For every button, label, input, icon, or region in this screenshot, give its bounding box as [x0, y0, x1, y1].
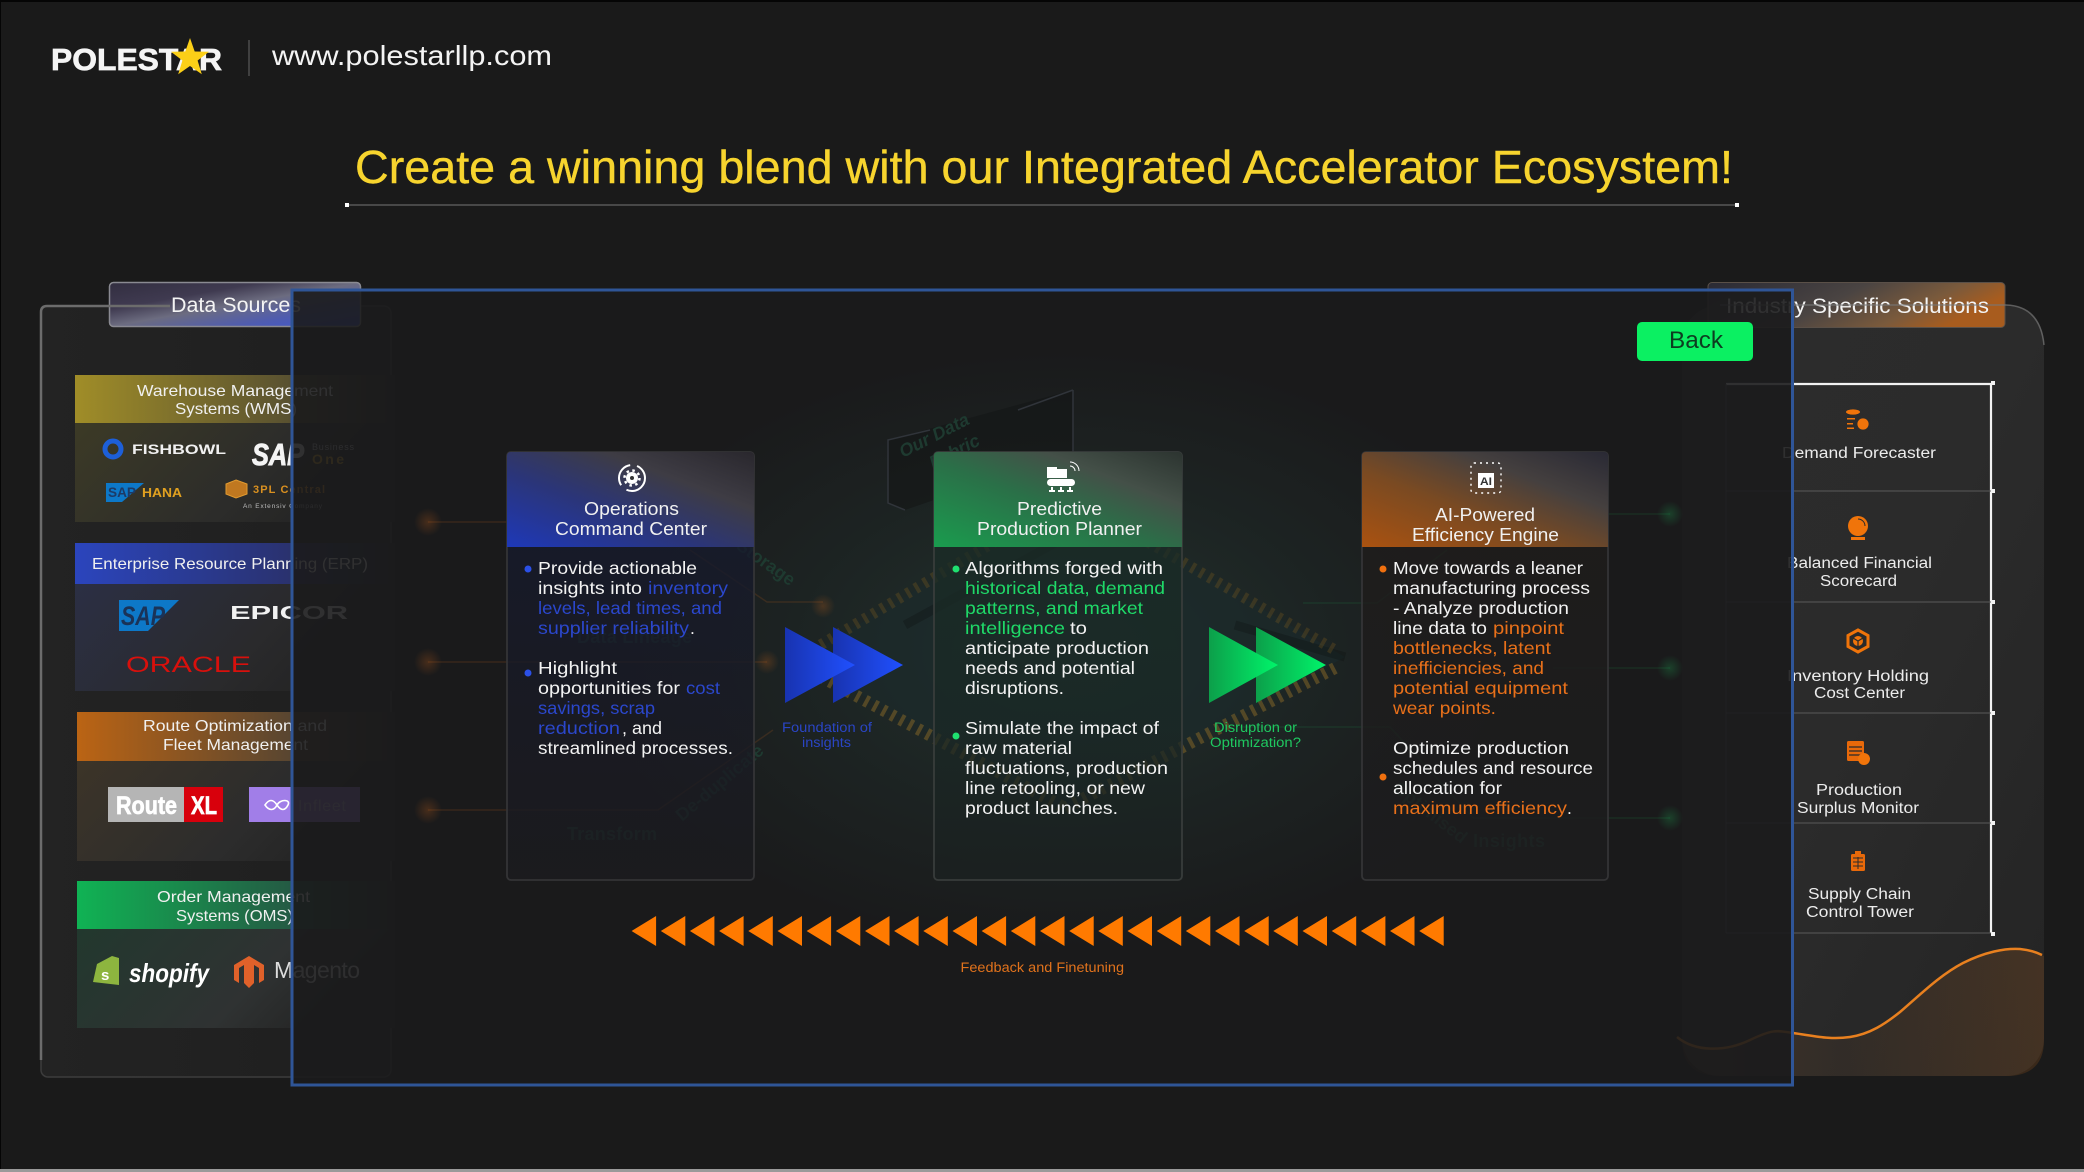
bullet text: raw material [965, 738, 1072, 758]
icon: AI chip [1471, 463, 1501, 493]
website address: www.polestarllp.com [271, 40, 552, 71]
card header [934, 452, 1182, 547]
card: warehouse management systems [75, 375, 395, 522]
card header: Predictive [1017, 499, 1102, 519]
logo: Magento [234, 956, 360, 988]
bullet text: pinpoint [1493, 618, 1564, 638]
bullet text: - Analyze production [1393, 598, 1569, 618]
arrow: foundation of insights: Foundation of [782, 720, 872, 735]
item: inventory holding cost center [1787, 630, 1929, 702]
item: balanced financial scorecard: Balanced Financial [1787, 555, 1932, 572]
logo: Shopify: shopify [129, 958, 210, 988]
logo: SAP Business One: Business [312, 442, 354, 452]
bullet text: maximum efficiency [1393, 798, 1567, 818]
icon: clipboard [1851, 851, 1865, 871]
background: faint chip and circuit traces: Data Lineage [577, 627, 692, 647]
card: order management systems [77, 881, 395, 1028]
card: warehouse management systems: Systems (WMS) [175, 401, 297, 418]
bullet text: allocation for [1393, 778, 1502, 798]
logo: 3PL Central: An Extensiv Company [243, 503, 323, 510]
card header: Operations [584, 499, 679, 519]
item: inventory holding cost center: Inventory Holding [1787, 668, 1929, 685]
item: supply chain control tower [1806, 851, 1914, 921]
logo: Route XL [108, 787, 223, 822]
bullet text: inefficiencies, and [1393, 658, 1544, 678]
card: order management systems: Systems (OMS) [176, 908, 293, 925]
logo: SAP Business One: One [312, 451, 344, 467]
item: demand forecaster [1782, 409, 1936, 462]
card: warehouse management systems: Warehouse Management [137, 383, 334, 400]
bullet text: intelligence [965, 618, 1065, 638]
bullet text: Highlight [538, 658, 617, 678]
bullet text: , and [622, 718, 662, 738]
bullet text: inventory [648, 578, 728, 598]
background: faint chip and circuit traces: Insights [1473, 831, 1545, 851]
bullet text: potential equipment [1393, 678, 1568, 698]
icon: calculator and money bag [1847, 741, 1870, 765]
logo: fleet tool [249, 787, 360, 822]
card: route optimization and fleet management: Route Optimization and [143, 718, 327, 735]
logo: Route XL: XL [191, 792, 217, 820]
card header: AI-Powered [1435, 505, 1535, 525]
card: route optimization and fleet management: Fleet Management [163, 737, 309, 754]
title: Create a winning blend with our Integrated Accelerator Ecosystem! [355, 141, 1733, 193]
background: faint chip and circuit traces: De-duplicate [672, 740, 767, 825]
logo: 3PL Central: 3PL Central [253, 484, 325, 496]
list frame [1726, 381, 1995, 936]
bullet text: Algorithms forged with [965, 558, 1163, 578]
logo: SAP: SAP [121, 601, 166, 631]
bullet text: reduction [538, 718, 620, 738]
bullet text: product launches. [965, 798, 1118, 818]
arrow: disruption or optimization: Disruption or [1214, 720, 1298, 735]
item: demand forecaster: Demand Forecaster [1782, 445, 1936, 462]
item: supply chain control tower: Supply Chain [1808, 886, 1911, 903]
item: production surplus monitor: Surplus Monitor [1797, 800, 1919, 817]
bullet text [1380, 558, 1593, 818]
bullet text: Simulate the impact of [965, 718, 1159, 738]
bullet text: opportunities for [538, 678, 680, 698]
logo: SAP HANA: HANA [142, 485, 183, 500]
logo: Polestar: POLESTAR [51, 42, 222, 77]
background: faint chip and circuit traces: Storage [733, 535, 799, 590]
bullet text: schedules and resource [1393, 758, 1593, 778]
bullet text: savings, scrap [538, 698, 655, 718]
card header: Production Planner [977, 519, 1142, 539]
bullet text: line retooling, or new [965, 778, 1145, 798]
icon: hexagon hub [1848, 630, 1868, 652]
bullet text: historical data, demand [965, 578, 1165, 598]
bullet text: . [690, 618, 695, 638]
bullet text: insights into [538, 578, 642, 598]
tab: data sources [110, 282, 360, 326]
back button [1637, 322, 1753, 361]
panel: data sources [41, 282, 395, 1077]
bullet text: cost [686, 678, 720, 698]
logo: Magento: Magento [274, 957, 360, 983]
background: faint chip and circuit traces: Fabric [926, 430, 983, 473]
icon: AI chip: AI [1480, 476, 1492, 488]
item: production surplus monitor [1797, 741, 1919, 817]
bullet text: Provide actionable [538, 558, 697, 578]
item: balanced financial scorecard [1787, 516, 1932, 590]
logo: Epicor: EPICOR [230, 603, 348, 623]
bullet text: levels, lead times, and [538, 598, 722, 618]
bullet text [952, 558, 1168, 818]
background: faint chip and circuit traces [414, 350, 1683, 950]
logo: Shopify: s [101, 967, 109, 984]
background: faint chip and circuit traces: Optimised [1390, 777, 1471, 847]
logo: Shopify [93, 956, 210, 988]
icon: rotating gear [619, 465, 645, 491]
item: production surplus monitor: Production [1816, 782, 1902, 799]
bullet text: anticipate production [965, 638, 1149, 658]
card header [507, 452, 754, 547]
logo: Route XL: Route [116, 792, 177, 820]
card header [1362, 452, 1608, 547]
bullet text: supplier reliability [538, 618, 689, 638]
arrow: disruption or optimization: Optimization? [1210, 735, 1301, 750]
tab: industry specific solutions: Industry Specific Solutions [1726, 295, 1989, 318]
bullet text: streamlined processes. [538, 738, 733, 758]
bullet text: . [1567, 798, 1572, 818]
bullet text: bottlenecks, latent [1393, 638, 1551, 658]
logo: SAP Business One [252, 437, 354, 472]
bullet text: manufacturing process [1393, 578, 1590, 598]
bullet text: wear points. [1392, 698, 1496, 718]
feedback label: Feedback and Finetuning [960, 960, 1124, 975]
card header: Command Center [555, 519, 707, 539]
bullet text: Optimize production [1393, 738, 1569, 758]
icon: crystal ball [1848, 516, 1868, 540]
panel: industry specific solutions [1677, 282, 2044, 1076]
arrow: disruption or optimization [1209, 627, 1326, 750]
card: enterprise resource planning [75, 543, 395, 691]
panel: operations command center [507, 452, 754, 880]
bullet text: fluctuations, production [965, 758, 1168, 778]
logo: Fishbowl: FISHBOWL [132, 441, 227, 457]
bullet text: line data to [1393, 618, 1487, 638]
item: balanced financial scorecard: Scorecard [1820, 573, 1897, 590]
item: inventory holding cost center: Cost Center [1814, 685, 1905, 702]
card header: Efficiency Engine [1412, 525, 1559, 545]
bullet text: to [1070, 618, 1087, 638]
bullet text [524, 558, 733, 758]
bullet text: needs and potential [965, 658, 1135, 678]
wave chart [1677, 949, 2044, 1076]
item: supply chain control tower: Control Tower [1806, 904, 1914, 921]
bullet text: disruptions. [965, 678, 1064, 698]
tab: data sources: Data Sources [171, 294, 301, 317]
logo: SAP HANA: SAP [108, 484, 136, 500]
logo: SAP HANA [106, 483, 183, 502]
background: faint chip and circuit traces: Transform [567, 824, 657, 844]
icon: smart conveyor [1047, 462, 1079, 492]
logo: Fishbowl [105, 441, 227, 457]
arrow: foundation of insights [782, 627, 903, 750]
logo: Oracle: ORACLE [126, 652, 251, 677]
card: order management systems: Order Management [157, 889, 311, 906]
logo: fleet tool: Infleet [298, 798, 347, 815]
overlay panel [292, 290, 1792, 1085]
tab: industry specific solutions [1708, 282, 2005, 328]
bullet text: Move towards a leaner [1393, 558, 1583, 578]
arrow: feedback row [632, 916, 1444, 946]
icon: coins [1846, 409, 1869, 430]
panel: predictive production planner [934, 452, 1182, 880]
background: faint chip and circuit traces: Our Data [896, 409, 973, 462]
logo: SAP Business One: SAP [252, 437, 304, 472]
bullet text: patterns, and market [965, 598, 1143, 618]
title underline [345, 203, 1739, 207]
logo: 3PL Central [226, 480, 325, 510]
card: route optimization and fleet management [77, 712, 395, 861]
arrow: foundation of insights: insights [802, 735, 851, 750]
card: enterprise resource planning: Enterprise Resource Planning (ERP) [92, 556, 368, 573]
panel: ai-powered efficiency engine [1362, 452, 1608, 880]
back button: Back [1669, 327, 1724, 354]
